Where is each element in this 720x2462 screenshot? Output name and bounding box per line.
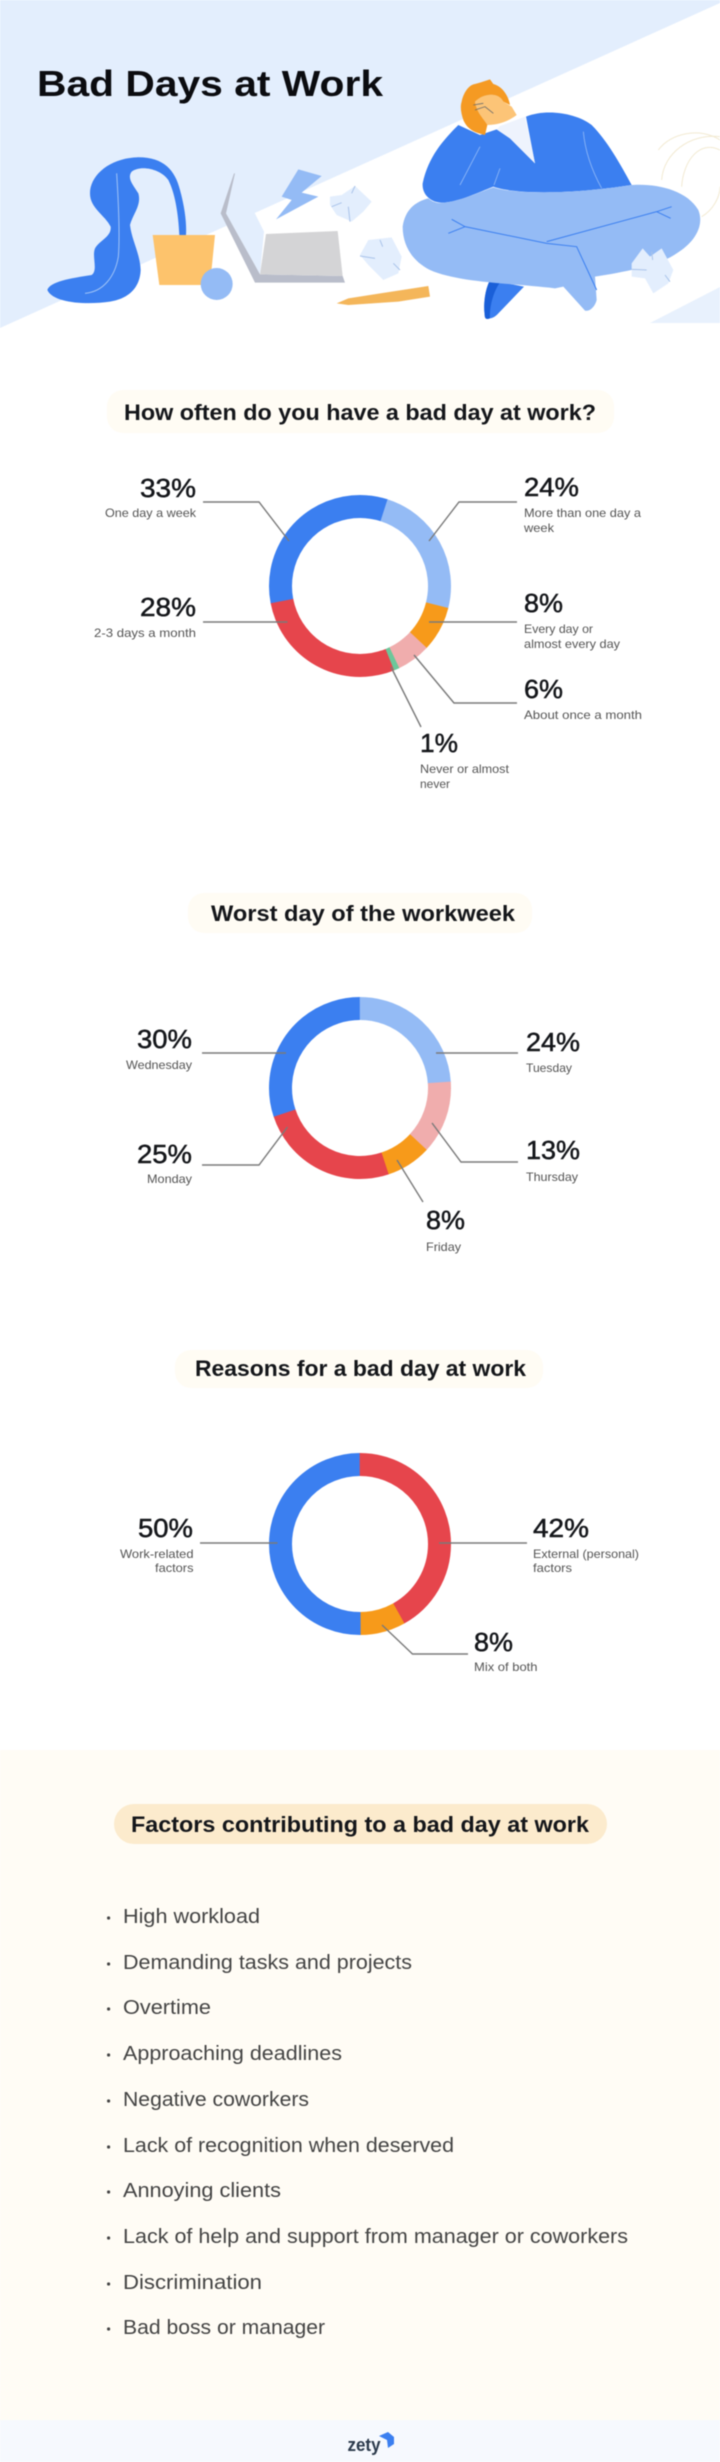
- label: 6%: 6%: [524, 674, 563, 704]
- label: 13%: Thursday: [526, 1170, 578, 1184]
- label: 8%: [524, 588, 620, 651]
- person hair and hand: [461, 79, 510, 135]
- panel: worst day: [126, 893, 580, 1254]
- logo wordmark: zety: [348, 2435, 380, 2455]
- label: 13%: [526, 1135, 580, 1184]
- panel: reasons: [120, 1350, 639, 1674]
- icon: crumpled paper 3: [632, 248, 673, 293]
- donut chart: reasons: [252, 1436, 468, 1652]
- icon: pencil: [337, 286, 430, 305]
- icon: logo mark: [379, 2432, 394, 2448]
- panel: factors: [0, 1750, 720, 2420]
- donut chart: weekdays: [248, 976, 472, 1200]
- icon: crumpled paper 2: [360, 237, 402, 280]
- desk objects: [47, 157, 430, 305]
- label: 24%: 24%: [526, 1027, 580, 1057]
- person torso and arm: [423, 113, 632, 203]
- label: 8%: Friday: [426, 1240, 461, 1254]
- factor list: Lack of recognition when deserved: [123, 2135, 454, 2157]
- heading pill: How often do you have a bad day at work?: [124, 400, 596, 425]
- label: 50%: 50%: [138, 1513, 193, 1543]
- leg fold lines: [448, 207, 672, 290]
- label: 50%: [120, 1513, 194, 1575]
- glasses strokes: [473, 103, 493, 113]
- icon: plant: [47, 157, 233, 303]
- footer with logo: [0, 2420, 720, 2462]
- heading pill: [107, 390, 614, 433]
- factor list: Overtime: [123, 1997, 211, 2019]
- heading pill: [175, 1350, 543, 1388]
- label: 13%: 13%: [526, 1135, 580, 1165]
- panel background: [0, 1750, 720, 2420]
- label: 30%: [126, 1024, 192, 1072]
- label: 33%: 33%: [140, 473, 196, 503]
- donut chart: frequency: [248, 474, 472, 698]
- factor list: Negative coworkers: [123, 2089, 309, 2111]
- factor list: Bad boss or manager: [123, 2317, 325, 2339]
- label: 1%: never: [420, 777, 450, 791]
- factor list: High workload: [123, 1906, 260, 1928]
- person foot: [484, 280, 524, 319]
- label: 8%: 8%: [426, 1205, 465, 1235]
- label: 28%: [94, 592, 196, 640]
- person face: [475, 95, 517, 125]
- decorative scribble: [658, 133, 720, 217]
- leader lines: [203, 502, 517, 727]
- sleeve highlights: [460, 132, 602, 188]
- label: 28%: 28%: [140, 592, 196, 622]
- factor list: [107, 1906, 628, 2339]
- label: 24%: [526, 1027, 580, 1075]
- shirt collar: [497, 117, 535, 163]
- label: 24%: week: [523, 521, 555, 535]
- title: Bad Days at Work: [37, 63, 384, 104]
- heading pill: Factors contributing to a bad day at work: [131, 1812, 590, 1837]
- header diagonal background: [0, 0, 720, 328]
- label: 1%: Never or almost: [420, 762, 510, 776]
- label: 8%: 8%: [524, 588, 563, 618]
- person legs: [403, 185, 700, 311]
- icon: laptop: [221, 173, 345, 283]
- label: 33%: One day a week: [105, 506, 197, 520]
- label: 42%: External (personal): [533, 1547, 639, 1561]
- label: 8%: 8%: [474, 1627, 513, 1657]
- heading pill: Reasons for a bad day at work: [195, 1356, 527, 1381]
- label: 30%: Wednesday: [126, 1058, 192, 1072]
- factor list: Discrimination: [123, 2272, 262, 2294]
- factor list: Demanding tasks and projects: [123, 1952, 412, 1974]
- label: 25%: 25%: [137, 1139, 192, 1169]
- factor list: Lack of help and support from manager or coworkers: [123, 2226, 628, 2248]
- label: 24%: 24%: [524, 472, 579, 502]
- leader lines: [200, 1543, 527, 1654]
- label: 30%: 30%: [137, 1024, 192, 1054]
- panel: header illustration: [0, 0, 720, 328]
- label: 24%: Tuesday: [526, 1061, 572, 1075]
- label: 50%: factors: [155, 1561, 194, 1575]
- label: 8%: [426, 1205, 465, 1254]
- leader lines: [202, 1053, 518, 1202]
- label: 25%: [137, 1139, 192, 1186]
- label: 42%: factors: [533, 1561, 572, 1575]
- label: 1%: [420, 728, 510, 791]
- label: 8%: Every day or: [524, 622, 593, 636]
- label: 50%: Work-related: [120, 1547, 194, 1561]
- factor list: Approaching deadlines: [123, 2043, 342, 2065]
- label: 42%: 42%: [533, 1513, 589, 1543]
- icon: crumpled paper 1: [330, 186, 372, 222]
- label: 42%: [533, 1513, 639, 1575]
- label: 6%: About once a month: [524, 708, 642, 722]
- corner background triangle: [650, 287, 720, 323]
- label: 8%: Mix of both: [474, 1660, 538, 1674]
- icon: lightning bolt: [276, 169, 322, 219]
- heading pill: [114, 1804, 607, 1844]
- label: 6%: [524, 674, 642, 722]
- heading pill: [188, 893, 532, 933]
- footer background: [0, 2420, 720, 2462]
- label: 25%: Monday: [147, 1172, 192, 1186]
- panel: how often: [94, 390, 642, 791]
- label: 1%: 1%: [420, 728, 458, 758]
- label: 24%: More than one day a: [524, 506, 641, 520]
- label: 28%: 2-3 days a month: [94, 626, 196, 640]
- label: 33%: [105, 473, 197, 520]
- label: 8%: [474, 1627, 538, 1674]
- icon: person: [403, 79, 720, 319]
- heading pill: Worst day of the workweek: [211, 901, 516, 926]
- factor list: Annoying clients: [123, 2180, 281, 2202]
- label: 24%: [523, 472, 641, 535]
- label: 8%: almost every day: [524, 637, 620, 651]
